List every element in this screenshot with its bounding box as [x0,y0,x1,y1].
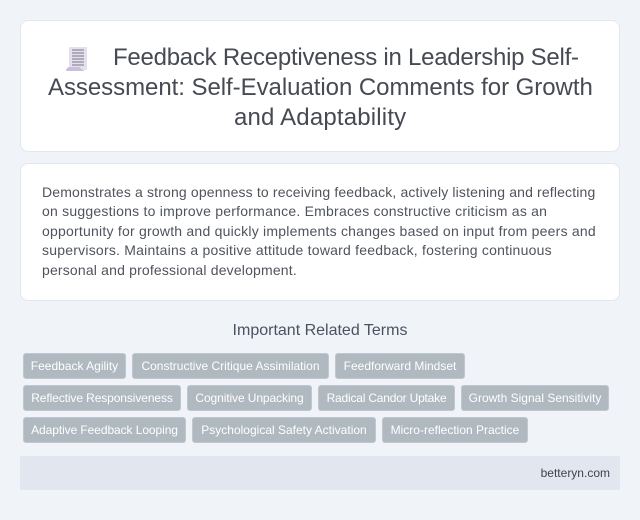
text: Adaptive Feedback Looping [31,423,178,437]
panel: description card [20,163,620,301]
text: Reflective Responsiveness [31,391,173,405]
text: Radical Candor Uptake [327,391,446,405]
footer bar [20,456,620,490]
text: Feedback Receptiveness in Leadership Self- [113,44,579,71]
text: Constructive Critique Assimilation [141,359,320,373]
text: Demonstrates a strong openness to receiving feedback, actively listening and reflecting [42,184,595,200]
text: Psychological Safety Activation [201,423,367,437]
text: opportunity for growth and quickly implements changes based on input from peers and [42,223,596,239]
text: Micro-reflection Practice [391,423,519,437]
text: supervisors. Maintains a positive attitude toward feedback, fostering continuous [42,242,552,258]
text: and Adaptability [234,104,406,131]
icon: scroll document [66,47,87,71]
text: on suggestions to improve performance. Embraces constructive criticism as an [42,203,547,219]
text: Growth Signal Sensitivity [469,391,601,405]
heading: related terms: Important Related Terms [233,322,407,339]
text: Feedback Agility [31,359,118,373]
panel: title card [20,20,620,152]
tag list [23,353,609,443]
text: Feedforward Mindset [344,359,456,373]
footer text: betteryn.com [541,466,610,480]
title [48,44,593,131]
text block: description [42,184,596,278]
text: personal and professional development. [42,262,297,278]
text: Cognitive Unpacking [195,391,304,405]
text: Assessment: Self-Evaluation Comments for Growth [48,74,593,101]
